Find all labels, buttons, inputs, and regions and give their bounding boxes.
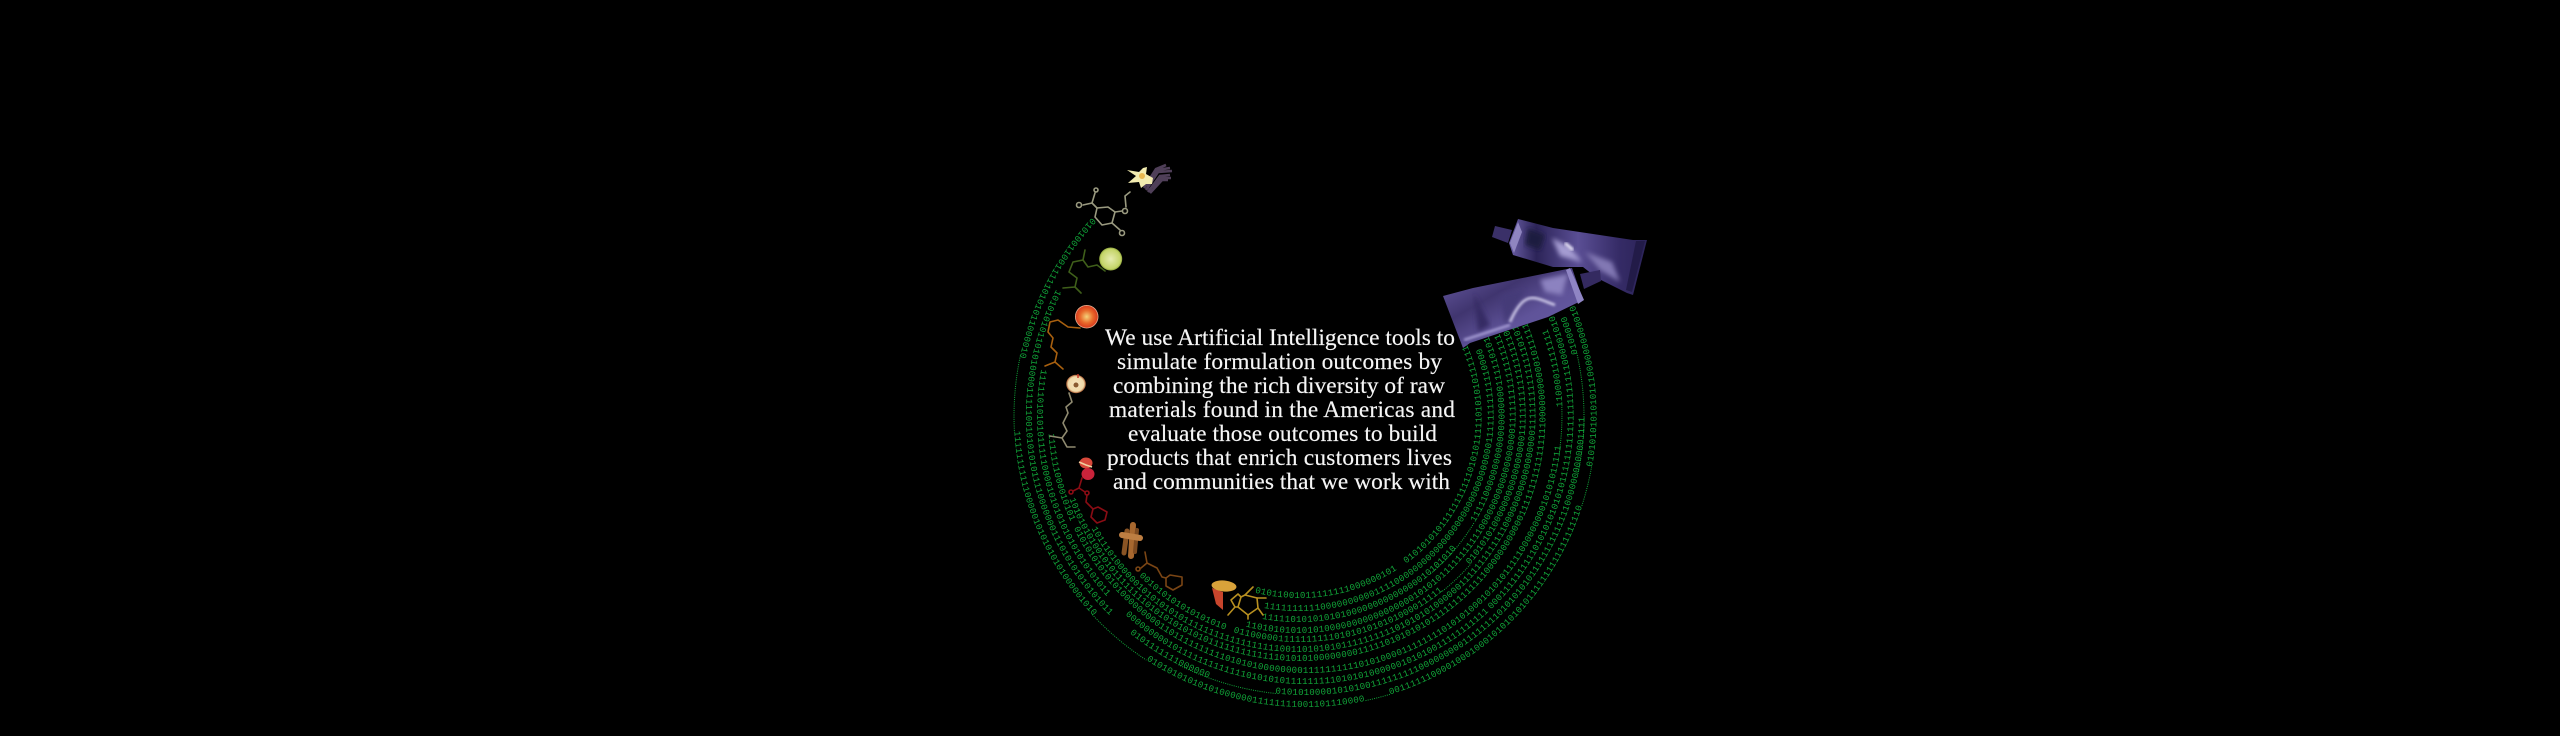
icon: strawberries: [1079, 458, 1094, 480]
binary ring 9: 11111010101010100000000000000010101010 11111000000000000000000001111101010: [1262, 336, 1505, 622]
body text block: We use Artificial Intelligence tools to: [1105, 325, 1455, 351]
icon: apple half: [1066, 374, 1086, 393]
binary ring 6: 1011101000000101010101011111111111111111100110101010111111111101010101000000111111111111100000000000000000011111111111111101010: [1092, 327, 1536, 652]
binary ring 8: 110101010101010000000000000000010101011111111111000000000000000000011111111111111111: [1246, 334, 1516, 633]
back tube: [1492, 219, 1647, 295]
body text block: evaluate those outcomes to build: [1128, 421, 1437, 447]
molecule: orange ester: [1045, 320, 1080, 369]
body text block: and communities that we work with: [1113, 469, 1450, 495]
body text block: combining the rich diversity of raw: [1113, 373, 1445, 399]
molecule: vanillin: [1076, 188, 1130, 236]
molecule: caffeine: [1228, 587, 1266, 619]
molecule: apple ester: [1050, 393, 1075, 447]
binary spiral: [1014, 218, 1597, 708]
body text block: simulate formulation outcomes by: [1117, 349, 1442, 375]
binary ring 1: 0101001100111110101011000010 111111111110000010101010101000001010 0101010101010100000011111111001101110000 0011111100001000100010101010101111111111111111110010101010101011100000000000100: [1014, 218, 1597, 708]
binary ring 4: 1111111000010101 0101010101010100000000011011111111110101010000000011111111110101000011111111010101000101010111110000000001010101111111000011111111: [1048, 329, 1562, 673]
icon: cinnamon sticks: [1122, 525, 1140, 556]
molecule: benzyl ester: [1069, 478, 1107, 523]
front tube: [1443, 268, 1601, 348]
icon: blood orange slice: [1075, 305, 1098, 328]
body text block: products that enrich customers lives: [1107, 445, 1452, 471]
body text block: [1105, 325, 1455, 495]
binary ring 5: 1010101010010101111111101010101010101111111111111010101000000001111101010101011111111111110000000000001111111111111111100000000000101111111111: [1070, 324, 1546, 661]
icon: purple tubes: [1443, 219, 1647, 348]
icon: vanilla flower and pods: [1127, 165, 1172, 193]
molecule: cinnamaldehyde: [1136, 552, 1182, 590]
icon: lime slice: [1099, 248, 1122, 270]
binary ring 2: 10101010110101000011111001010101011110000000111010101010101011 0101111111000000 01010100001010100111111111000000000111111110101010101111111111111100000000000011110100000: [1026, 290, 1584, 695]
body text block: materials found in the Americas and: [1109, 397, 1455, 423]
dotted connectors: [1014, 353, 1592, 701]
binary ring 10: 111111111100000000001111000000000000000000000000000000011111111111110000: [1264, 349, 1494, 611]
binary ring 3: 1111101010101111100001010101010101010101011 00000000010111111111111101010101111111110101010000001010100111111111110001111111111010101010101011111111111111111111100000101011: [1037, 314, 1574, 684]
binary ring 7: 001010101010101010 011000001111111111010101010101000011111 010101010000000000000000011111111111111111101: [1140, 331, 1526, 642]
icon: almond: [1211, 579, 1237, 610]
molecule: citral: [1063, 250, 1105, 293]
binary ring 11: 01011001011111111000000101 0101010101111111111101010111110101010111111: [1256, 345, 1482, 598]
